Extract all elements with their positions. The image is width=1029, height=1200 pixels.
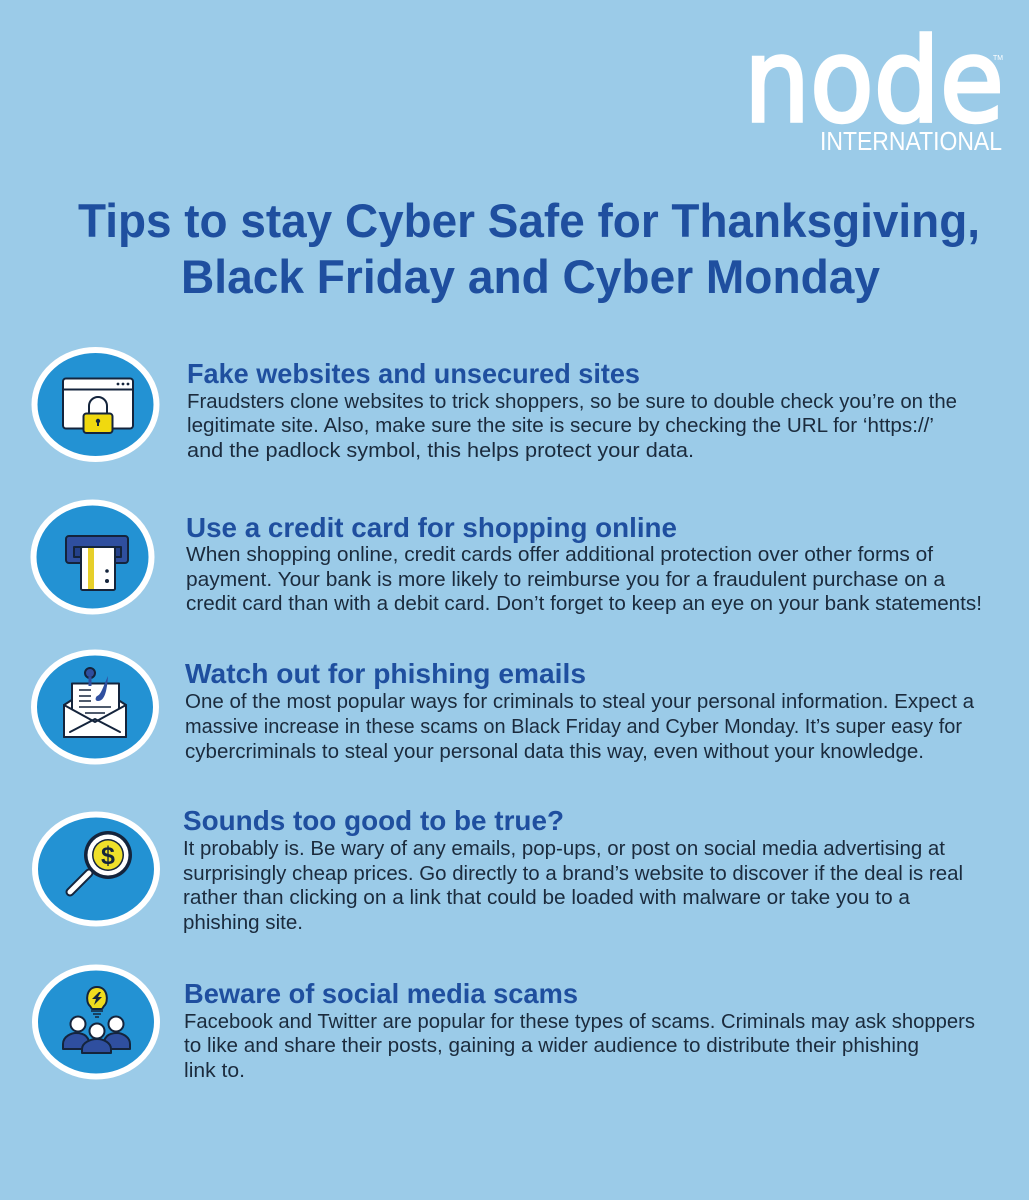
heading: social media scams: Beware of social media scams — [184, 978, 578, 1009]
panel: fake websites — [34, 350, 957, 462]
text block: too good to be true: surprisingly cheap prices. Go directly to a brand’s website to discover if the deal is real — [183, 863, 963, 885]
panel: social media scams — [35, 968, 975, 1082]
text block: social media scams: link to. — [184, 1060, 245, 1082]
text block: social media scams: Facebook and Twitter are popular for these types of scams. Criminals may ask shoppers — [184, 1011, 975, 1033]
text block: fake websites — [187, 391, 957, 462]
heading: phishing emails: Watch out for phishing emails — [185, 658, 586, 689]
text block: phishing emails: One of the most popular ways for criminals to steal your personal information. Expect a — [185, 691, 975, 713]
text block: credit card: credit card than with a debit card. Don’t forget to keep an eye on your bank statements! — [186, 593, 982, 615]
icon: people with light bulb — [35, 968, 157, 1076]
logo: node International: TM — [993, 55, 1003, 62]
icon: browser window with padlock — [34, 350, 156, 459]
logo: node International: INTERNATIONAL — [820, 126, 1002, 156]
text block: fake websites: and the padlock symbol, this helps protect your data. — [187, 440, 694, 462]
text block: phishing emails: cybercriminals to steal your personal data this way, even without your knowledge. — [185, 741, 924, 763]
text block: too good to be true: It probably is. Be wary of any emails, pop-ups, or post on social media advertising at — [183, 838, 945, 860]
icon: magnifying glass with dollar — [35, 814, 157, 924]
icon: magnifying glass with dollar: $ — [101, 842, 115, 870]
text block: too good to be true — [183, 838, 963, 934]
text block: credit card: payment. Your bank is more likely to reimburse you for a fraudulent purchase on a — [186, 569, 946, 591]
panel: phishing emails — [34, 652, 975, 763]
text block: too good to be true: phishing site. — [183, 912, 303, 934]
text block: too good to be true: rather than clicking on a link that could be loaded with malware or take you to a — [183, 887, 911, 909]
text block: fake websites: Fraudsters clone websites to trick shoppers, so be sure to double check you’re on the — [187, 391, 957, 413]
text block: social media scams: to like and share their posts, gaining a wider audience to distribute their phishing — [184, 1035, 919, 1057]
icon: credit card in slot — [34, 502, 152, 612]
text block: phishing emails: massive increase in these scams on Black Friday and Cyber Monday. It’s super easy for — [185, 716, 962, 738]
title — [78, 194, 980, 303]
text block: credit card — [186, 544, 982, 615]
text block: fake websites: legitimate site. Also, make sure the site is secure by checking the URL for ‘https://’ — [187, 415, 934, 437]
text block: credit card: When shopping online, credit cards offer additional protection over other forms of — [186, 544, 933, 566]
title: Black Friday and Cyber Monday — [181, 250, 880, 303]
logo: node International: node — [744, 14, 1004, 149]
text block: phishing emails — [185, 691, 975, 763]
panel: too good to be true — [35, 805, 963, 934]
panel: credit card — [34, 502, 982, 615]
icon: envelope with fish hook — [34, 652, 156, 762]
title: Tips to stay Cyber Safe for Thanksgiving, — [78, 194, 980, 247]
heading: credit card: Use a credit card for shopping online — [186, 512, 677, 543]
heading: fake websites: Fake websites and unsecured sites — [187, 358, 640, 389]
heading: too good to be true: Sounds too good to be true? — [183, 805, 564, 836]
text block: social media scams — [184, 1011, 975, 1082]
